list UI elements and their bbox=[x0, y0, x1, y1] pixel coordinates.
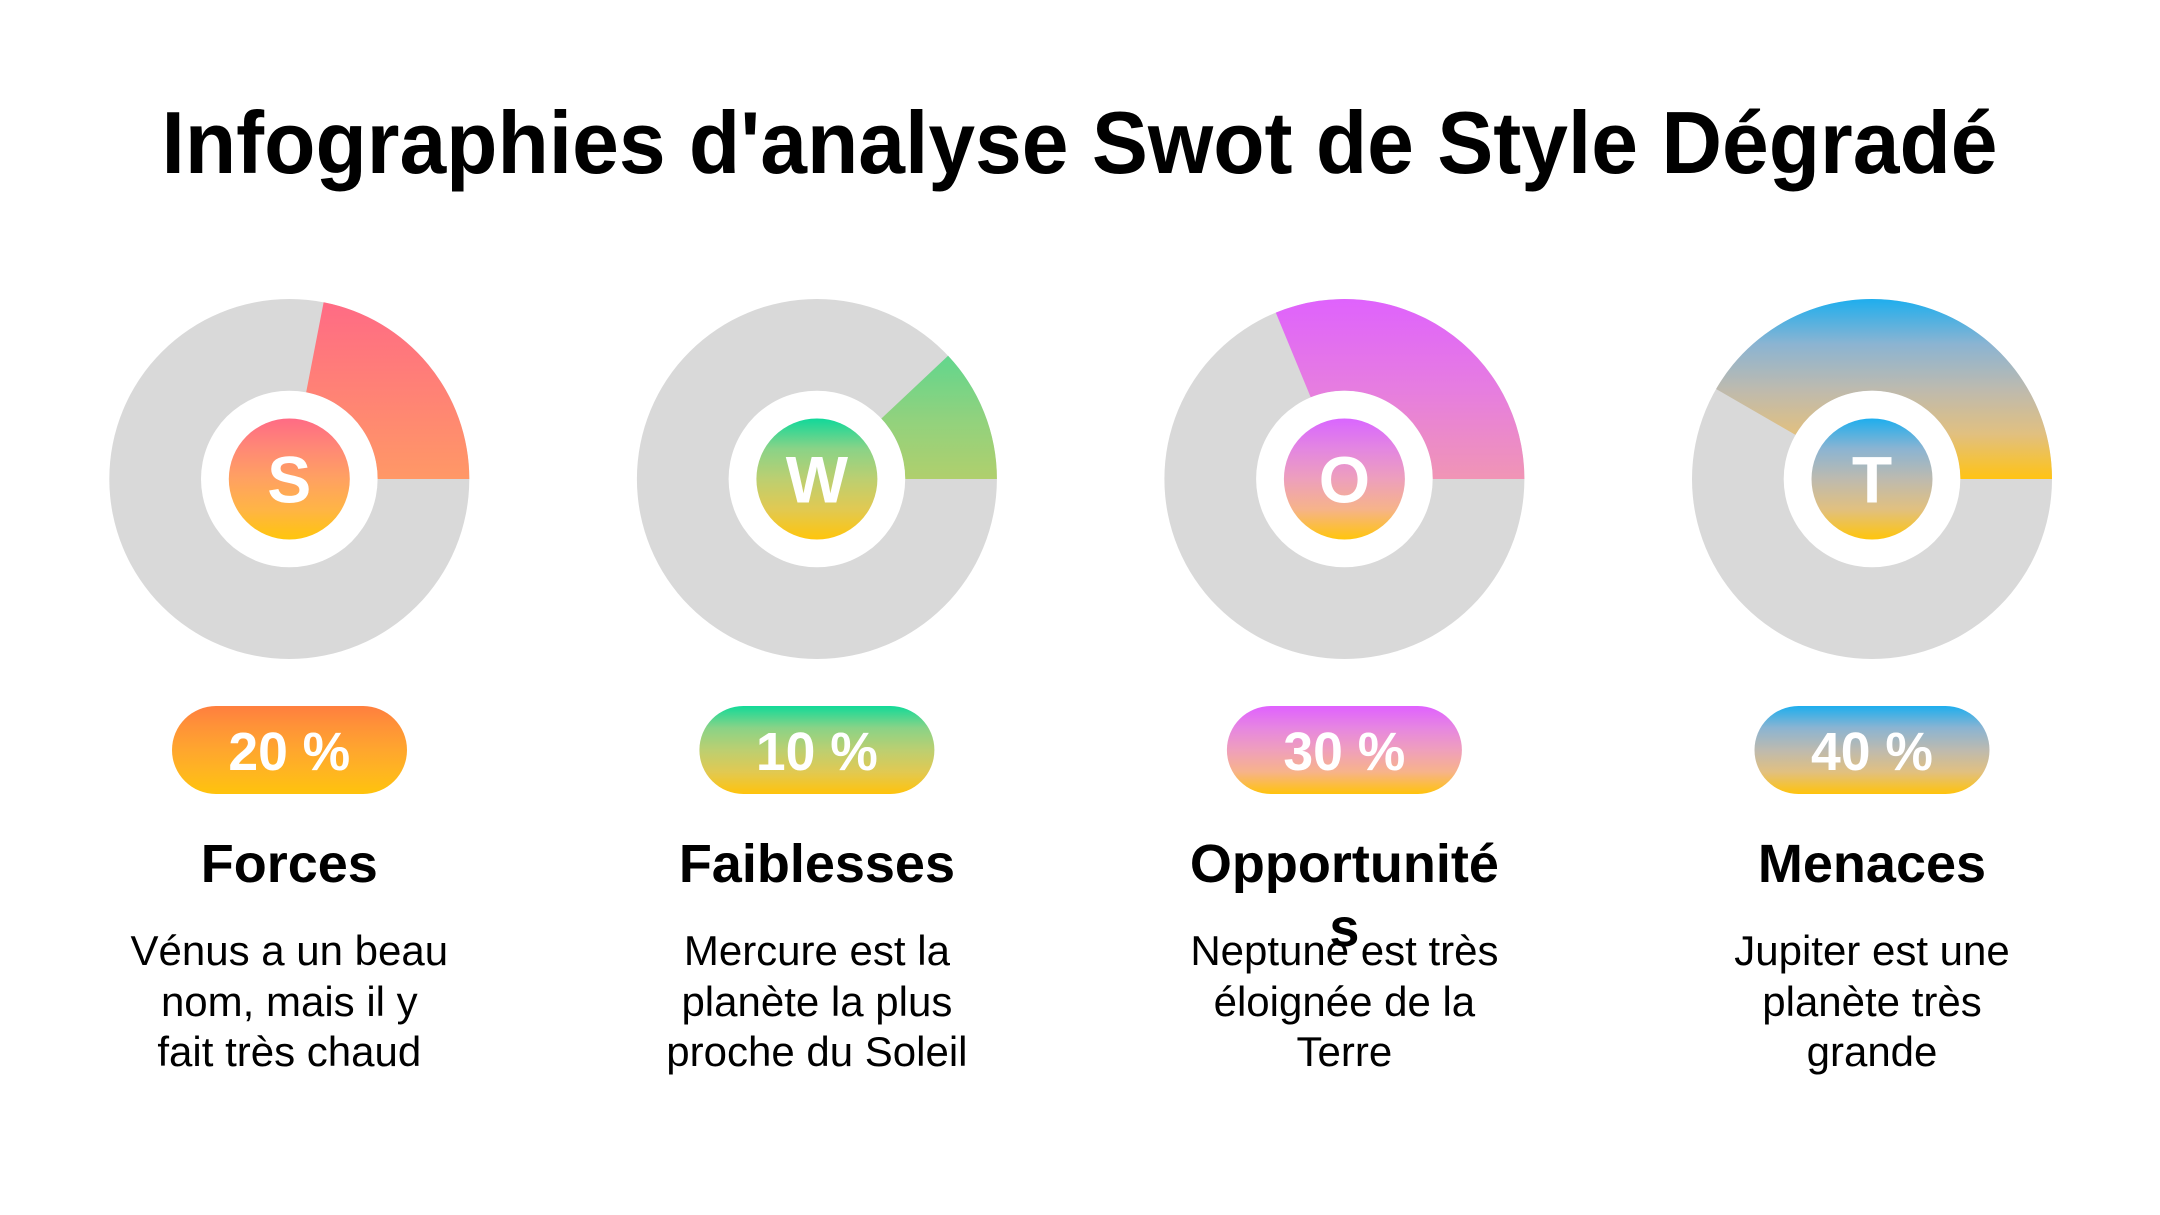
donut chart: S bbox=[109, 299, 469, 659]
percentage pill: 30 % bbox=[1227, 706, 1462, 794]
heading: Opportunités: Opportunité bbox=[1190, 834, 1499, 894]
description: Menaces: Jupiter est une bbox=[1734, 927, 2010, 974]
description: Opportunités: éloignée de la bbox=[1214, 978, 1476, 1025]
heading: Faiblesses: Faiblesses bbox=[679, 834, 955, 894]
description: Faiblesses: Mercure est la bbox=[684, 927, 951, 974]
description: Opportunités bbox=[1190, 927, 1498, 1075]
percentage pill: 20 % bbox=[172, 706, 407, 794]
panel: Forces bbox=[109, 299, 469, 1075]
percentage pill: 40 % bbox=[1754, 706, 1990, 794]
badge: W bbox=[756, 418, 877, 540]
description: Faiblesses: planète la plus bbox=[681, 978, 952, 1025]
badge: O bbox=[1284, 418, 1405, 540]
percentage pill: 10 %: 10 % bbox=[756, 723, 878, 782]
percentage pill: 40 %: 40 % bbox=[1811, 723, 1933, 782]
description: Menaces: grande bbox=[1807, 1028, 1937, 1075]
badge: S: S bbox=[267, 442, 311, 516]
slice: forces bbox=[306, 302, 469, 479]
description: Faiblesses bbox=[666, 927, 968, 1075]
percentage pill: 20 %: 20 % bbox=[228, 723, 350, 782]
description: Forces bbox=[130, 927, 448, 1075]
heading: Opportunités: s bbox=[1329, 898, 1359, 958]
badge: T bbox=[1812, 418, 1932, 540]
description: Forces: fait très chaud bbox=[157, 1028, 421, 1075]
description: Opportunités: Terre bbox=[1297, 1028, 1392, 1075]
badge: T: T bbox=[1852, 442, 1892, 516]
panel: Opportunités bbox=[1164, 299, 1524, 1075]
badge: W: W bbox=[786, 442, 849, 516]
title: Infographies d'analyse Swot de Style Dégradé bbox=[162, 93, 1998, 192]
percentage pill: 30 %: 30 % bbox=[1283, 723, 1405, 782]
description: Forces: nom, mais il y bbox=[161, 978, 418, 1025]
description: Forces: Vénus a un beau bbox=[130, 927, 448, 974]
description: Opportunités: Neptune est très bbox=[1190, 927, 1498, 974]
heading: Menaces: Menaces bbox=[1758, 834, 1986, 894]
panel: Faiblesses bbox=[637, 299, 997, 1075]
heading: Opportunités bbox=[1190, 834, 1499, 958]
description: Faiblesses: proche du Soleil bbox=[666, 1028, 968, 1075]
heading: Forces: Forces bbox=[201, 834, 378, 894]
slice: faiblesses bbox=[881, 356, 997, 479]
donut chart: O bbox=[1164, 299, 1524, 659]
description: Menaces bbox=[1734, 927, 2010, 1075]
badge: S bbox=[229, 418, 350, 540]
slice: opportunités bbox=[1276, 299, 1524, 479]
panel: Menaces bbox=[1692, 299, 2052, 1075]
donut chart: T bbox=[1692, 299, 2052, 659]
description: Menaces: planète très bbox=[1762, 978, 1982, 1025]
percentage pill: 10 % bbox=[699, 706, 934, 794]
donut chart: W bbox=[637, 299, 997, 659]
slice: menaces bbox=[1716, 299, 2052, 479]
badge: O: O bbox=[1319, 442, 1370, 516]
